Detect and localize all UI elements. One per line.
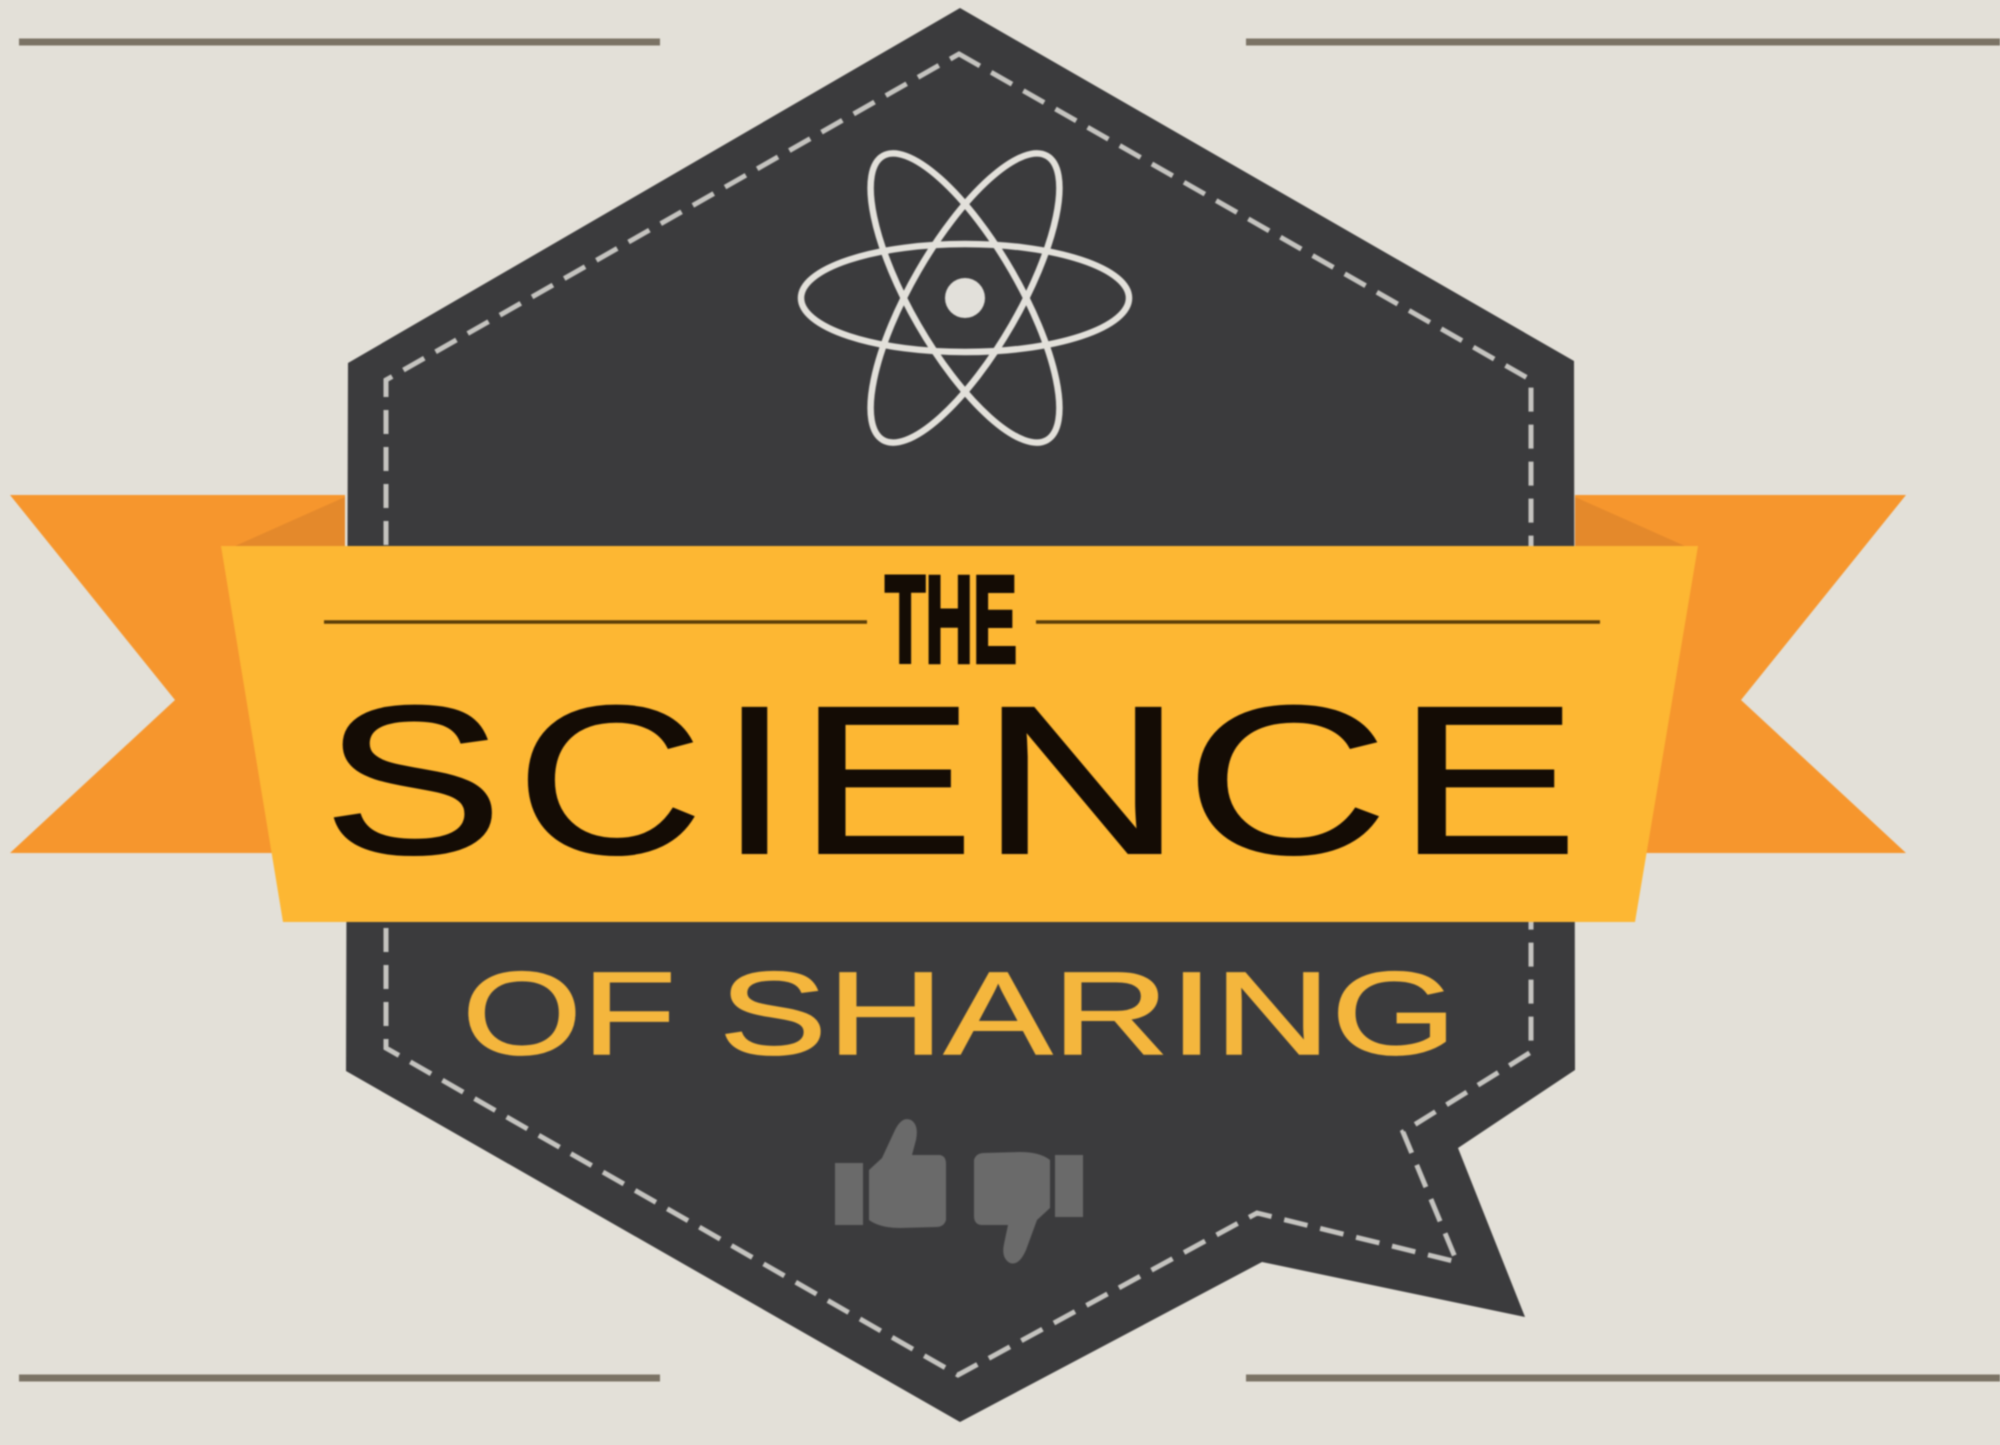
title: SCIENCE: E [1397,662,1578,898]
title: THE: THE [885,552,1017,689]
title: SCIENCE [323,662,1578,898]
ribbon tails [10,495,1906,853]
title: SCIENCE: I [720,662,789,898]
title rule lines [324,620,1600,624]
icon: thumbs up [835,1119,946,1228]
title: SCIENCE: S [323,662,503,898]
title: SCIENCE: N [980,662,1183,898]
hexagonal speech badge [346,8,1575,1422]
subtitle: OF SHARING: OF [462,948,676,1080]
subtitle: OF SHARING: SHARING [719,948,1457,1080]
icon: atom [801,129,1129,467]
title: SCIENCE: E [798,662,974,898]
ribbon front [221,546,1698,922]
title: SCIENCE: C [516,662,703,898]
subtitle: OF SHARING [462,948,1457,1080]
ribbon folds [235,497,1685,546]
title: SCIENCE: C [1185,662,1388,898]
icon: thumbs down [974,1152,1083,1263]
dashed stitching [386,54,1531,1375]
